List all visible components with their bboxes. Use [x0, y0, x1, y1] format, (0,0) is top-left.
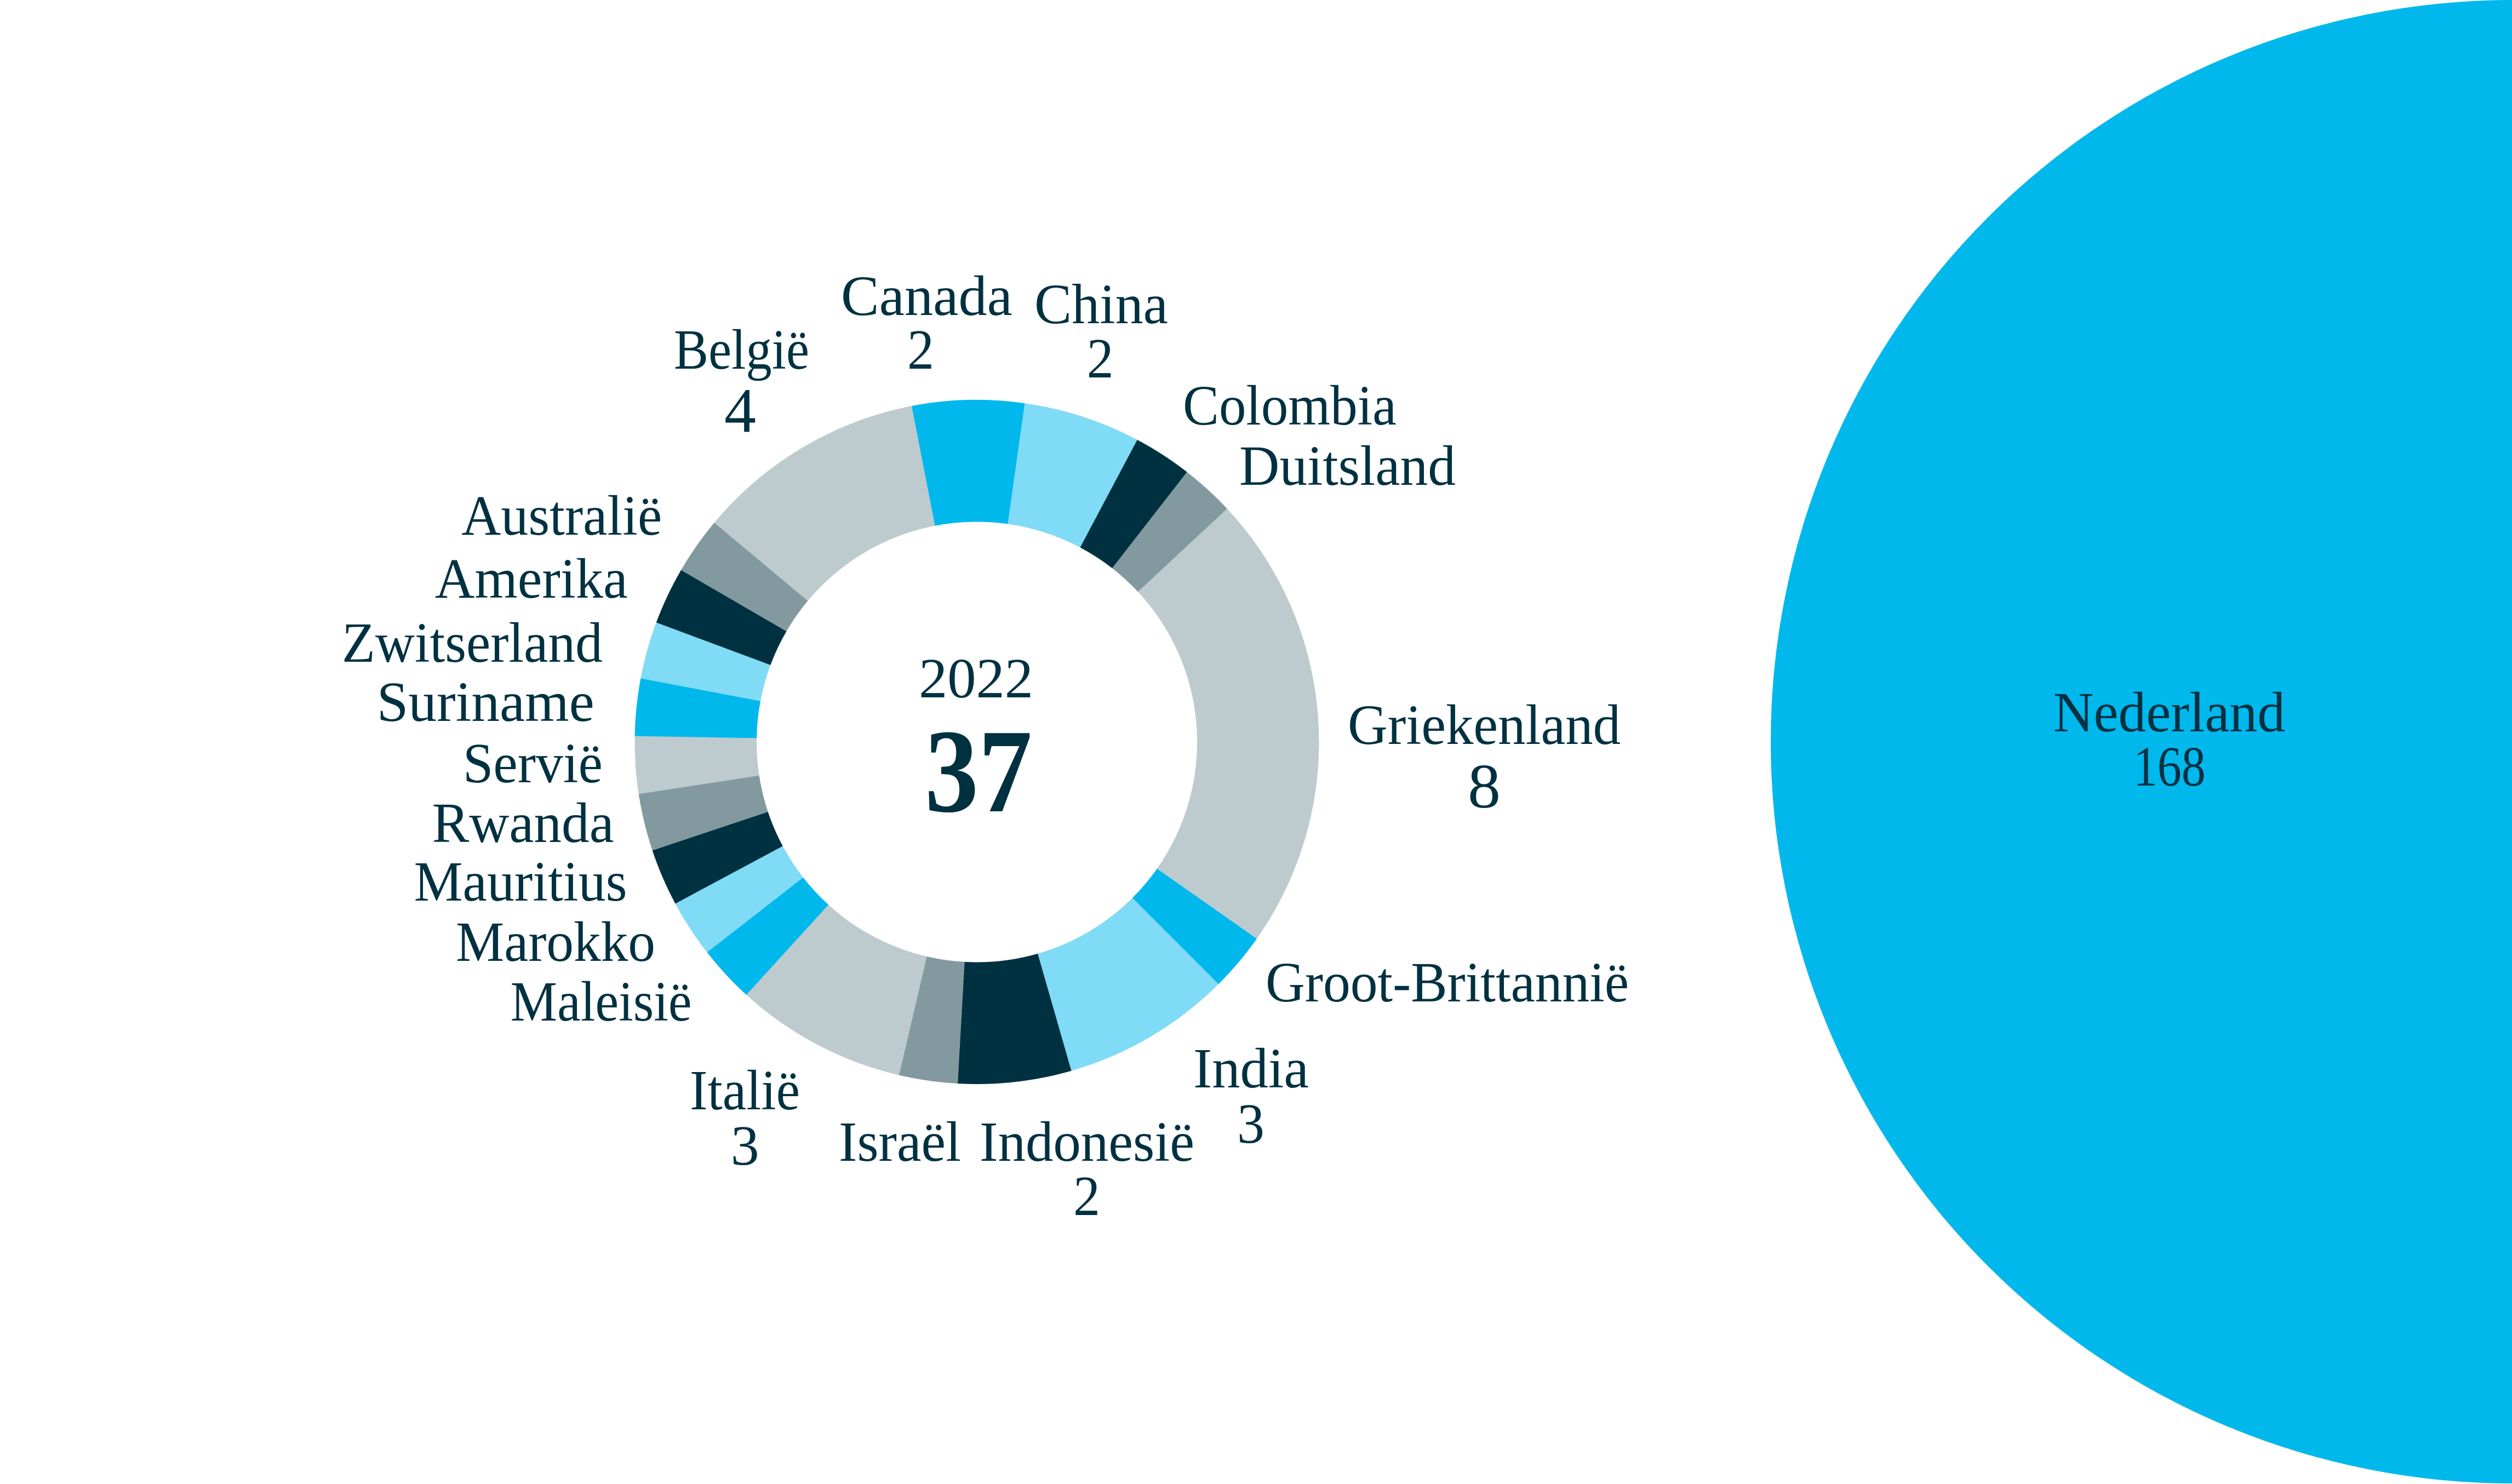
segment: Indonesië [958, 954, 1072, 1084]
label: Amerika: Amerika [435, 547, 628, 610]
segment: Australië [681, 523, 808, 631]
label: India: India [1193, 1037, 1309, 1100]
label: Nederland: Nederland [2053, 681, 2285, 744]
segment: Amerika [656, 570, 787, 665]
segment: Rwanda [639, 776, 768, 850]
segment: Mauritius [653, 812, 783, 904]
label: Mauritius: Mauritius [414, 850, 627, 913]
value: India: 3 [1237, 1092, 1264, 1155]
label: Indonesië: Indonesië [980, 1110, 1194, 1173]
label: Canada: Canada [841, 265, 1012, 328]
label: China: China [1034, 273, 1168, 336]
label: Marokko: Marokko [456, 910, 655, 973]
value: Nederland: 168 [2133, 735, 2206, 798]
segment: Duitsland [1112, 472, 1227, 592]
centre year label: 2022 [919, 647, 1033, 710]
segment: Griekenland [1138, 509, 1319, 939]
label: Colombia: Colombia [1183, 374, 1397, 437]
label: Duitsland: Duitsland [1239, 434, 1456, 497]
centre total: 37 [925, 706, 1032, 838]
segment: Marokko [676, 846, 803, 952]
label: België: België [674, 318, 809, 381]
label: Zwitserland: Zwitserland [342, 611, 603, 674]
donut chart: countries 2022 [635, 400, 1319, 1084]
value: Griekenland: 8 [1468, 752, 1501, 821]
label: Maleisië: Maleisië [511, 970, 692, 1033]
value: Indonesië: 2 [1073, 1165, 1100, 1228]
value: China: 2 [1087, 327, 1114, 390]
segment: België [714, 406, 935, 601]
label: Australië: Australië [461, 484, 662, 547]
value: Italië: 3 [731, 1114, 759, 1177]
segment: Zwitserland [640, 622, 770, 701]
label: Suriname: Suriname [377, 671, 594, 734]
segment: Suriname [635, 678, 760, 738]
segment: China [1008, 403, 1137, 547]
label: Groot-Brittannië: Groot-Brittannië [1266, 951, 1629, 1014]
value: Canada: 2 [907, 318, 934, 381]
value: België: 4 [724, 376, 756, 445]
segment: Israël [899, 956, 964, 1084]
segment: Servië [635, 736, 759, 794]
label: Italië: Italië [690, 1059, 800, 1122]
segment: India [1038, 898, 1218, 1071]
label: Rwanda: Rwanda [432, 792, 614, 855]
label: Israël: Israël [839, 1110, 961, 1173]
segment: Maleisië [707, 878, 828, 995]
label: Griekenland: Griekenland [1348, 694, 1621, 757]
segment: Italië [746, 905, 927, 1075]
segment: Canada [912, 400, 1025, 526]
segment: Colombia [1080, 440, 1187, 568]
label: Servië: Servië [463, 732, 603, 795]
segment: Groot-Brittannië [1132, 869, 1257, 984]
large circle: Nederland [1771, 0, 2512, 1483]
